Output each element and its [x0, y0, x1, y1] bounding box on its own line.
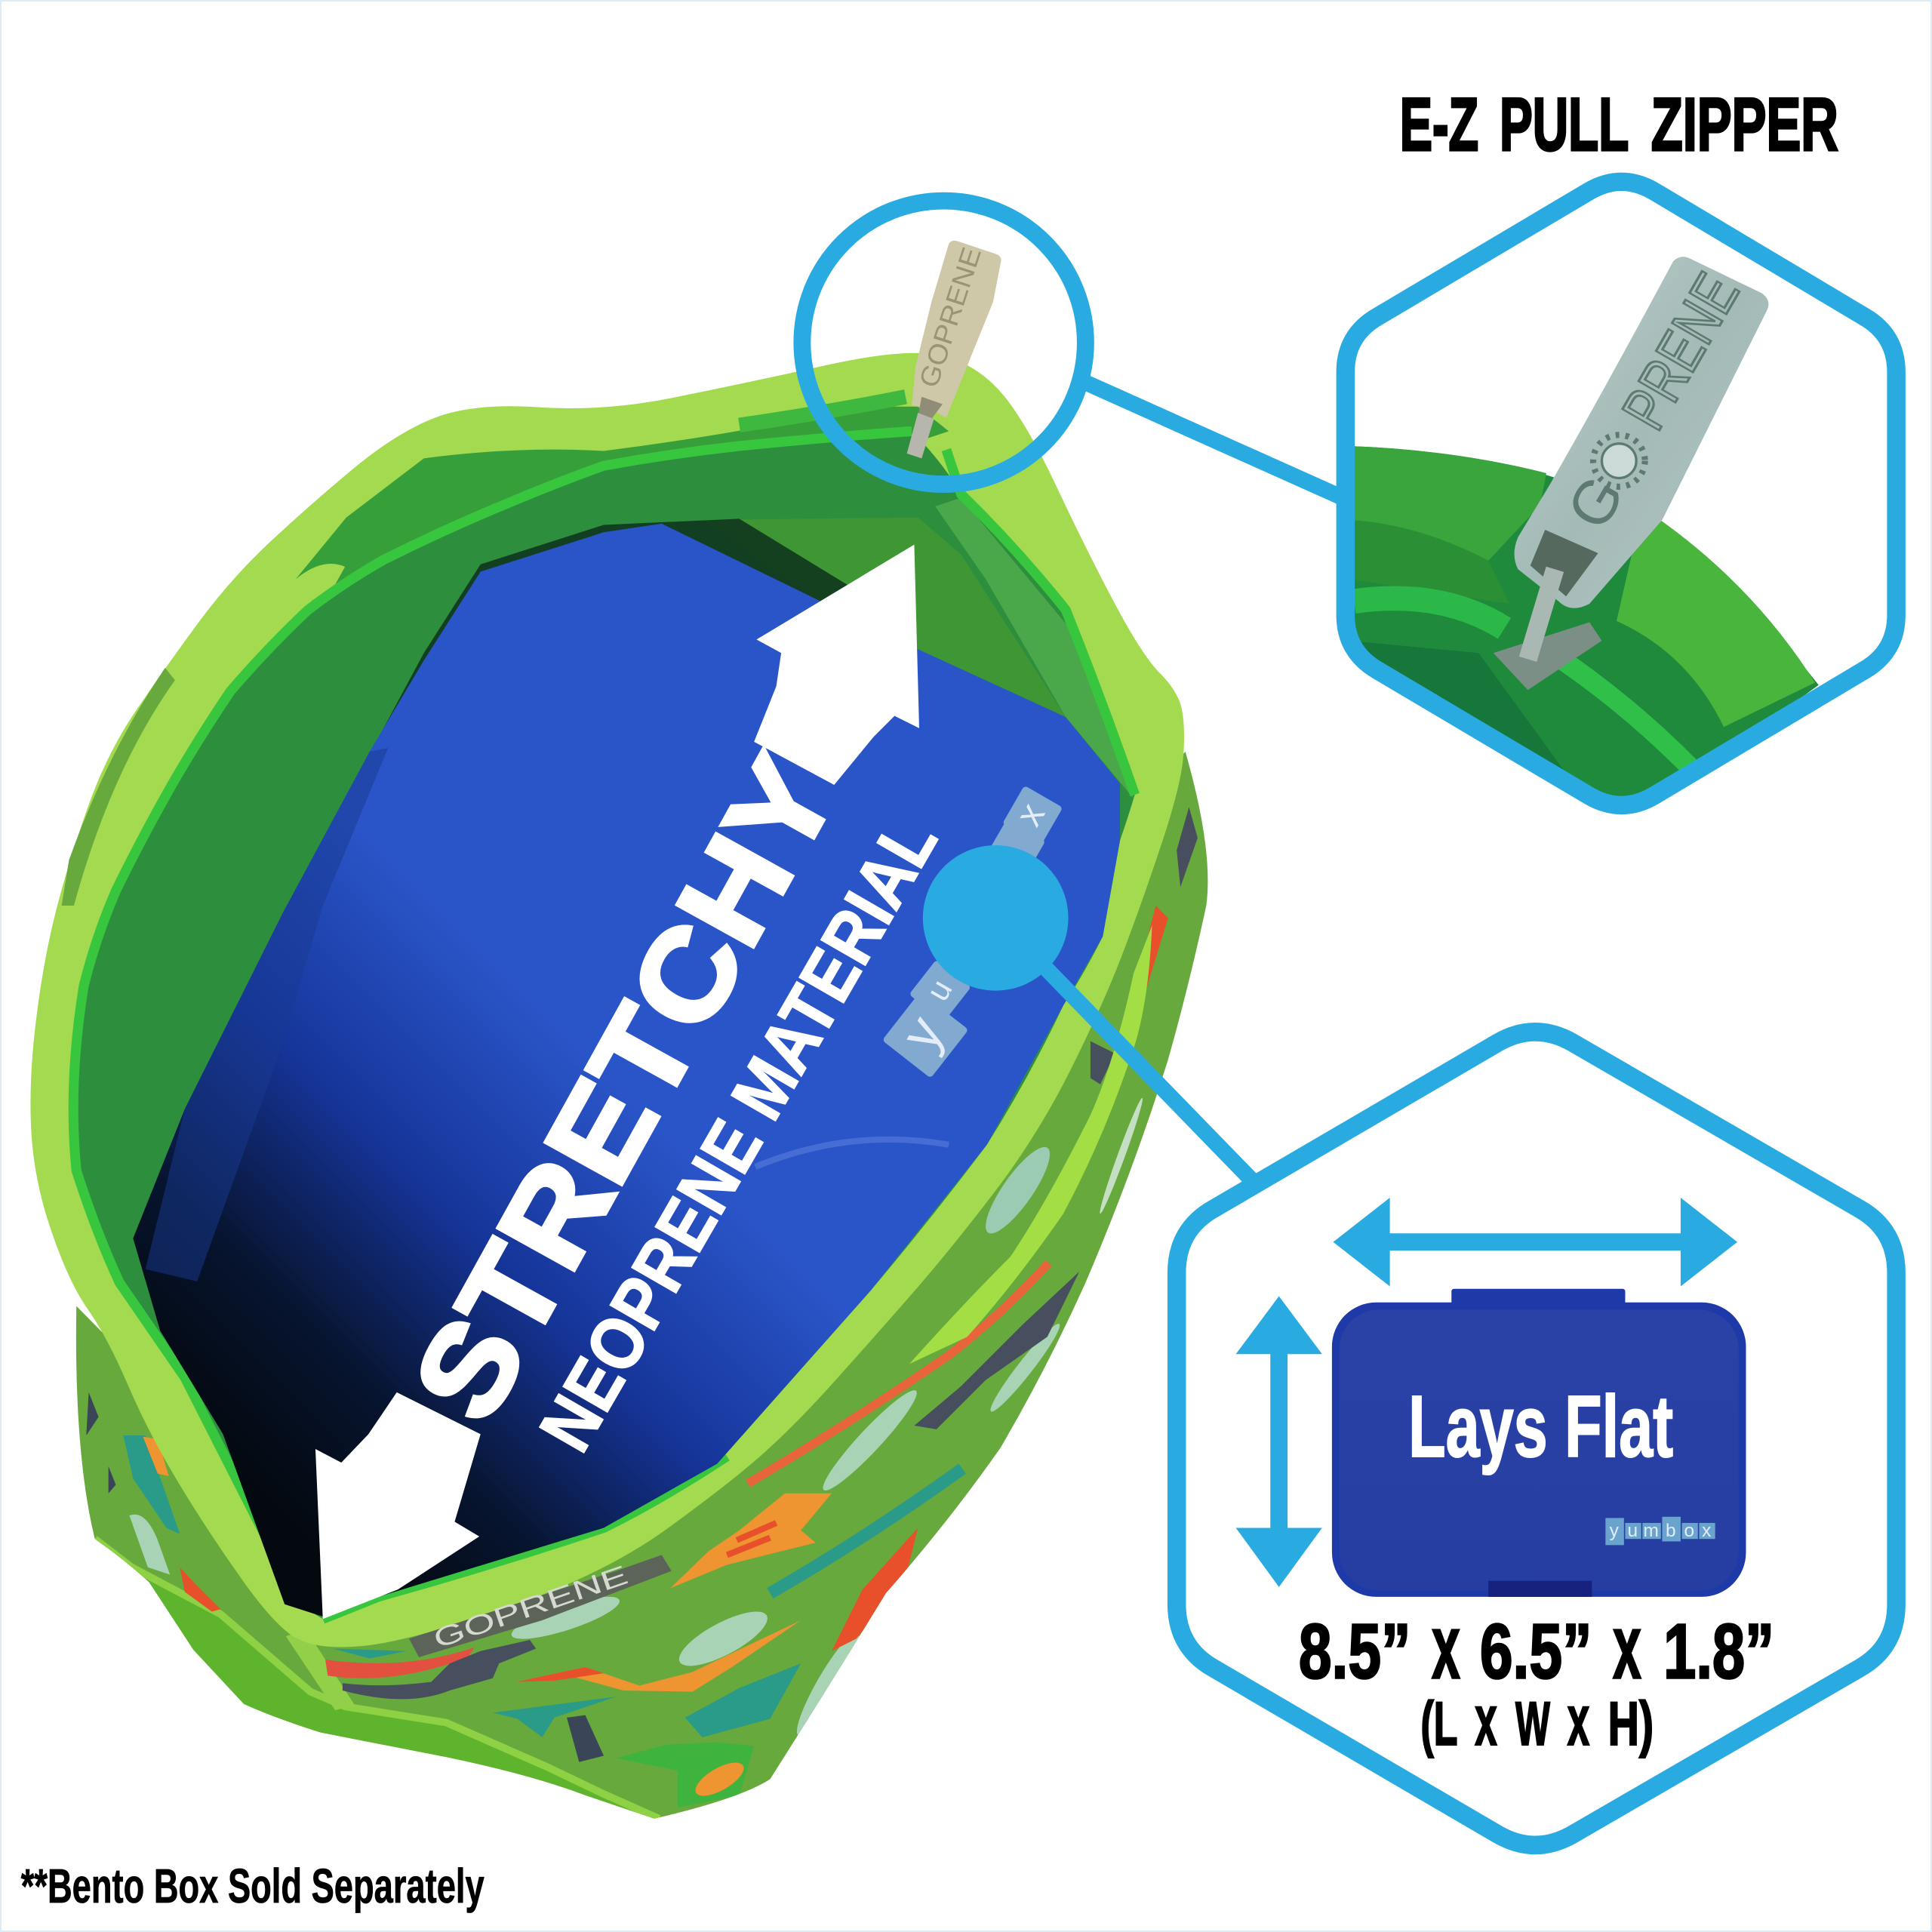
dimension key: W: [1515, 1690, 1550, 1758]
dimension key: H): [1608, 1690, 1654, 1758]
dimension key: (L: [1420, 1690, 1457, 1758]
GOPRENE bag tag: [409, 1555, 672, 1657]
large double-headed white arrow: [315, 545, 919, 1619]
logo on pull: [1554, 262, 1752, 540]
line from zipper circle to hexagon: [1084, 382, 1346, 499]
olive inner fabric: [703, 518, 1066, 717]
heading: E-Z PULL ZIPPER: E-Z: [1400, 83, 1478, 167]
connector lines: [1044, 382, 1346, 1186]
dimensions: 1.8”: [1663, 1608, 1774, 1695]
heading: E-Z PULL ZIPPER: [1400, 83, 1838, 167]
box label: Lays Flat: Lays Flat: [1408, 1377, 1673, 1475]
arrow: depth: [1236, 1297, 1322, 1587]
heading: E-Z PULL ZIPPER: PULL: [1500, 83, 1629, 167]
dimensions: [1299, 1596, 1774, 1698]
label: NEOPRENE MATERIAL: NEOPRENE MATERIAL: [524, 804, 952, 1464]
line from blue dot to hexagon: [1044, 968, 1257, 1186]
large zipper pull: [1515, 257, 1768, 659]
dimensions: x: [1613, 1596, 1641, 1698]
right lining panel: [935, 498, 1134, 798]
box logo: yumbox: o: [1684, 1521, 1694, 1541]
bag outer body with dinosaur print: [74, 752, 1208, 1836]
dimension key: x: [1567, 1681, 1589, 1761]
dimension key: x: [1475, 1681, 1497, 1761]
green inner band under rim: [296, 407, 949, 616]
dimensions: 6.5”: [1480, 1608, 1592, 1695]
dimension key: [1420, 1681, 1654, 1761]
side flap trim: [909, 925, 1152, 1364]
shadow behind bento box: [370, 518, 851, 754]
GOPRENE bag tag: GOPRENE: [429, 1559, 632, 1654]
callout circle around zipper: [802, 201, 1085, 485]
zipper close-up photo: [1349, 446, 1819, 807]
bento box inside bag: [133, 524, 1120, 1617]
product photo: neoprene lunch bag: [30, 241, 1208, 1836]
box logo tiles: yumbox: [882, 786, 1063, 1078]
logo on pull: G: [1554, 464, 1638, 540]
label: STRETCHY: STRETCHY: [386, 734, 864, 1442]
box logo tiles: yumbox: x: [1008, 796, 1053, 832]
small zipper pull on bag: [907, 241, 1001, 458]
panel: dimensions hexagon: [1177, 1032, 1897, 1845]
arrow: width: [1334, 1198, 1737, 1286]
logo on pull: PRENE: [1610, 262, 1752, 441]
blue dot marker: [923, 845, 1069, 991]
box logo: yumbox: b: [1666, 1521, 1676, 1541]
dimensions: x: [1432, 1596, 1460, 1698]
rim patch: [296, 564, 345, 606]
box logo tiles: yumbox: y: [890, 1007, 955, 1060]
box logo: yumbox: u: [1627, 1521, 1638, 1541]
bag rim trim: [30, 353, 1184, 1647]
box logo: yumbox: y: [1610, 1521, 1620, 1541]
gloss highlight on box lid: [755, 1140, 949, 1167]
panel: zipper hexagon: [1346, 182, 1897, 807]
illustration: closed bento box: [1332, 1289, 1746, 1597]
box logo: yumbox: x: [1702, 1521, 1711, 1541]
box logo tiles: yumbox: u: [919, 974, 959, 1007]
small zipper pull on bag: GOPRENE: [912, 243, 987, 391]
box logo: yumbox: m: [1644, 1521, 1659, 1541]
box logo: yumbox: [1605, 1517, 1715, 1545]
dimensions: 8.5”: [1299, 1608, 1411, 1695]
bag inner lining: [73, 431, 1135, 1619]
footnote: **Bento Box Sold Separately: [21, 1860, 485, 1913]
heading: E-Z PULL ZIPPER: ZIPPER: [1651, 83, 1838, 167]
printed body sliver beside rim: [62, 668, 175, 906]
zipper tape: [73, 397, 1135, 1619]
